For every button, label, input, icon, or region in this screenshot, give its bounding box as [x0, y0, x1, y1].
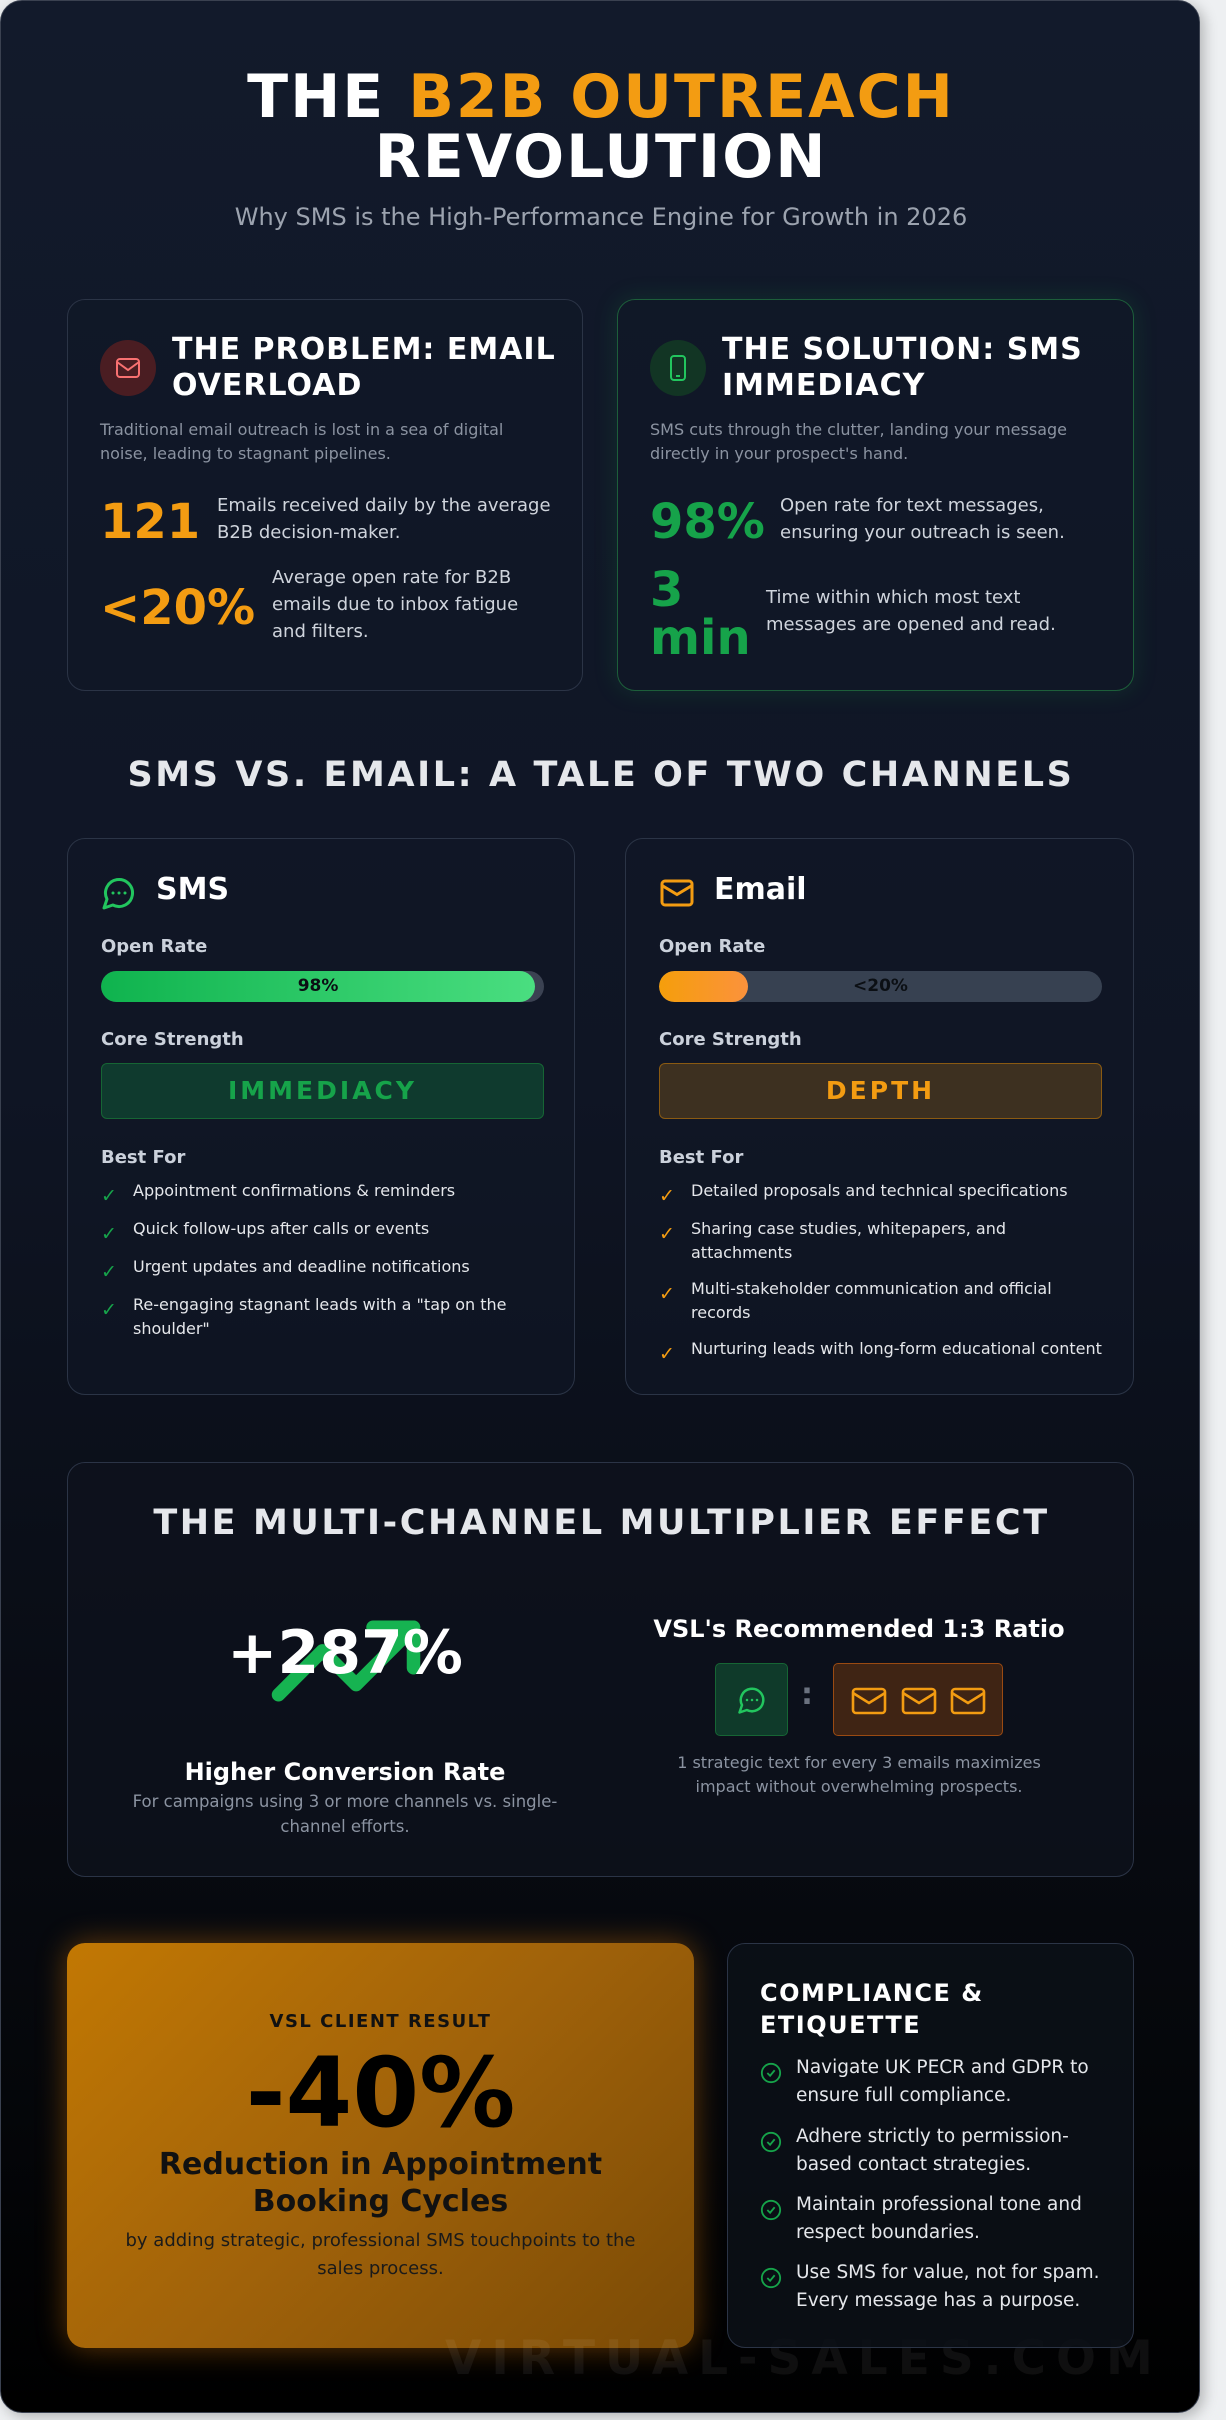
sub text: by adding strategic, professional SMS touchpoints to the sales process. — [125, 2230, 636, 2279]
bar: <20%: <20% — [853, 976, 908, 996]
box depth: DEPTH — [826, 1076, 935, 1105]
heading: IMMEDIACY — [722, 368, 925, 403]
box depth — [659, 1063, 1102, 1119]
list: Sharing case studies, whitepapers, and attachments — [691, 1219, 1006, 1262]
ratio icons — [715, 1663, 1003, 1736]
panel: compliance — [727, 1943, 1134, 2348]
label open rate: Open Rate — [659, 936, 765, 957]
icon: chat — [102, 878, 134, 910]
heading — [722, 332, 1083, 403]
stat <20%: <20% — [100, 580, 255, 636]
stat 3 min: min — [650, 610, 751, 666]
list: ✓ — [101, 1299, 117, 1321]
sub text: For campaigns using 3 or more channels vs. single-channel efforts. — [133, 1792, 557, 1836]
list: Use SMS for value, not for spam. Every message has a purpose. — [796, 2262, 1100, 2311]
list: Adhere strictly to permission-based contact strategies. — [796, 2126, 1069, 2175]
heading — [172, 332, 556, 403]
list: Quick follow-ups after calls or events — [133, 1219, 429, 1238]
list: Detailed proposals and technical specifications — [691, 1181, 1068, 1200]
box immediacy — [101, 1063, 544, 1119]
description: SMS cuts through the clutter, landing your message directly in your prospect's hand. — [650, 420, 1067, 463]
list: Multi-stakeholder communication and official records — [691, 1279, 1052, 1322]
label higher conversion: Higher Conversion Rate — [185, 1758, 505, 1786]
list: ✓ — [659, 1223, 675, 1245]
label best for: Best For — [101, 1147, 185, 1168]
subtitle: Why SMS is the High-Performance Engine for Growth in 2026 — [235, 203, 967, 231]
channel name: Email — [714, 872, 807, 907]
panel: sms — [67, 838, 575, 1395]
panel: client result — [67, 1943, 694, 2348]
icon: trending arrow — [272, 1620, 420, 1702]
stat 98%: 98% — [650, 494, 765, 550]
panel: solution — [617, 299, 1134, 691]
bar: 98% — [101, 971, 544, 1002]
panel: problem: Average open rate for B2B emails due to inbox fatigue and filters. — [272, 567, 518, 642]
list: Re-engaging stagnant leads with a "tap on the shoulder" — [133, 1295, 507, 1338]
heading: OVERLOAD — [172, 368, 362, 403]
label best for: Best For — [659, 1147, 743, 1168]
heading: THE PROBLEM: EMAIL — [172, 332, 556, 367]
label core strength: Core Strength — [101, 1029, 244, 1050]
stat 3 min: 3 — [650, 562, 683, 618]
list: Urgent updates and deadline notifications — [133, 1257, 470, 1276]
ratio title: VSL's Recommended 1:3 Ratio — [653, 1615, 1065, 1643]
headline — [159, 2147, 602, 2219]
heading: sms vs email: SMS VS. EMAIL: A TALE OF TWO CHANNELS — [128, 755, 1074, 795]
panel: problem: Emails received daily by the average B2B decision-maker. — [217, 495, 551, 543]
icon: phone — [650, 340, 706, 396]
list: Appointment confirmations & reminders — [133, 1181, 455, 1200]
channel name: SMS — [156, 872, 229, 907]
panel: email — [625, 838, 1134, 1395]
panel: multi-channel — [67, 1462, 1134, 1877]
panel: problem — [67, 299, 583, 691]
description: Traditional email outreach is lost in a sea of digital noise, leading to stagnant pipelines. — [100, 420, 503, 463]
colon: : — [801, 1677, 813, 1712]
stat +287%: +287% — [227, 1618, 463, 1688]
headline: Reduction in Appointment — [159, 2147, 602, 2182]
heading — [760, 1979, 984, 2039]
label open rate: Open Rate — [101, 936, 207, 957]
heading: THE SOLUTION: SMS — [722, 332, 1083, 367]
icon: mail red — [100, 340, 156, 396]
list: ✓ — [659, 1283, 675, 1305]
list: ✓ — [101, 1261, 117, 1283]
list: ✓ — [659, 1343, 675, 1365]
title: THE B2B OUTREACH — [247, 62, 955, 132]
stat 3 min — [650, 562, 751, 666]
label: VSL CLIENT RESULT — [270, 2011, 491, 2032]
list — [760, 2057, 1100, 2311]
title — [247, 62, 955, 192]
list: ✓ — [101, 1223, 117, 1245]
box immediacy: IMMEDIACY — [228, 1076, 417, 1105]
heading: COMPLIANCE & — [760, 1979, 984, 2007]
list: Navigate UK PECR and GDPR to ensure full compliance. — [796, 2057, 1089, 2106]
bar: <20% — [659, 971, 1102, 1002]
list — [101, 1181, 507, 1338]
title: REVOLUTION — [375, 122, 827, 192]
list: Maintain professional tone and respect boundaries. — [796, 2194, 1082, 2243]
ratio text: 1 strategic text for every 3 emails maximizes impact without overwhelming prospects. — [677, 1753, 1041, 1796]
stat -40%: -40% — [246, 2037, 515, 2149]
list: ✓ — [659, 1185, 675, 1207]
icon: mail — [660, 880, 694, 906]
panel: solution: Open rate for text messages, ensuring your outreach is seen. — [780, 495, 1065, 543]
heading: ETIQUETTE — [760, 2011, 921, 2039]
panel: solution: Time within which most text messages are opened and read. — [766, 587, 1056, 635]
label core strength: Core Strength — [659, 1029, 802, 1050]
heading: THE MULTI-CHANNEL MULTIPLIER EFFECT — [153, 1503, 1050, 1543]
stat 121: 121 — [100, 494, 200, 550]
list — [659, 1181, 1102, 1365]
icon: sms box — [715, 1663, 788, 1736]
watermark: VIRTUAL-SALES.COM — [445, 2331, 1163, 2386]
headline: Booking Cycles — [253, 2184, 508, 2219]
list: ✓ — [101, 1185, 117, 1207]
list: Nurturing leads with long-form educational content — [691, 1339, 1102, 1358]
icon: email box — [833, 1663, 1003, 1736]
bar: 98%: 98% — [298, 976, 338, 996]
